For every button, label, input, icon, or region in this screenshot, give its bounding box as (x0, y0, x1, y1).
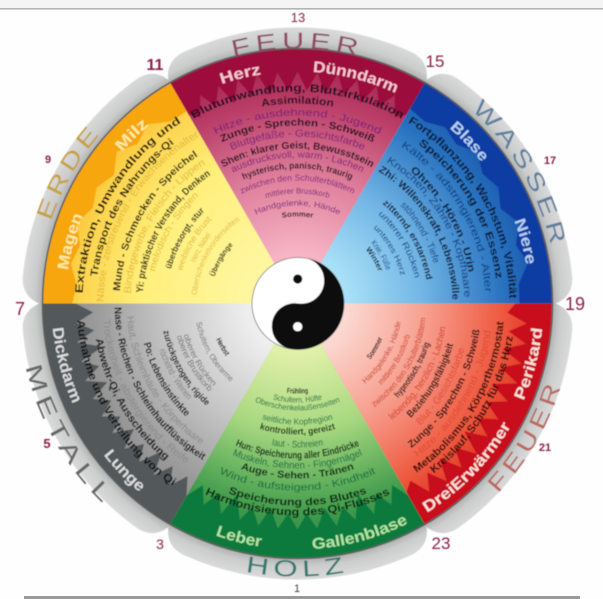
hour numbers: 23 (432, 534, 450, 553)
organ labels: Magen (56, 214, 83, 270)
hour numbers: 19 (565, 294, 585, 314)
text block: Wasser attributes: Speicherung der Essenz (419, 139, 502, 279)
text block: Feuer attributes: Handgelenke, Hände (359, 317, 409, 389)
text block: Metall attributes: röchelnd - Weinen (154, 346, 195, 403)
bottom grey bar (24, 596, 580, 599)
text block: Holz attributes: Wind - aufsteigend - Kindheit (218, 466, 377, 494)
text block: Erde attributes: Oberschenkelvorderseiten (181, 210, 243, 298)
text block: Holz attributes (205, 387, 390, 518)
text block: Feuer attributes: Zunge - Sprechen - Schweiß (220, 118, 375, 142)
text block: Feuer attributes: Blutumwandlung, Blutzirkulation (190, 84, 404, 119)
organ labels (56, 119, 149, 270)
hour numbers: 3 (156, 536, 164, 552)
text block: Wasser attributes: unteres Herz (374, 225, 406, 276)
heading: FEUER top: FEUER (229, 27, 366, 61)
text block: Feuer attributes: Shen: klarer Geist, Bewusstsein (220, 140, 374, 168)
text block: Holz attributes: Speicherung des Blutes (227, 485, 368, 509)
text block: Feuer attributes: hysterisch, panisch, traurig (241, 162, 353, 182)
heading: ERDE: ERDE (26, 115, 109, 226)
text block: Erde attributes: überbesorgt, stur (164, 208, 204, 269)
text block: Erde attributes: weibliche Brust (178, 216, 212, 270)
top page strip (0, 0, 603, 10)
hour numbers: 21 (539, 442, 551, 454)
text block: Erde attributes: Übergänge (206, 239, 235, 279)
text block: Metall attributes (76, 307, 233, 486)
text block: Feuer attributes: Kreislauf, Schutz für das Herz (426, 331, 529, 483)
text block: Erde attributes: Extraktion, Umwandlung und (74, 116, 181, 294)
text block: Erde attributes (74, 116, 240, 302)
organ labels: Niere (514, 218, 534, 264)
text block: Erde attributes: Nässe - zerstreuend - Erwachsenenalter (96, 132, 198, 302)
text block: Erde attributes: Transport des Nahrungs-Qi (90, 138, 174, 276)
heading: METALL: METALL (10, 355, 125, 517)
organ labels (450, 120, 534, 264)
hour numbers: 9 (45, 154, 51, 166)
heading: WASSER: WASSER (464, 88, 584, 257)
text block: Holz attributes: Hun: Speicherung aller Eindrücke (234, 438, 361, 462)
text block: Feuer attributes: Hitze - ausdehnend - Jugend (213, 108, 382, 134)
text block: Feuer attributes: Blut - Gesichtsfarbe (413, 344, 473, 431)
text block: Metall attributes: zurückgezogen, rigide (155, 327, 213, 411)
organ labels: DreiErwärmer (416, 405, 514, 531)
hour numbers: 15 (426, 52, 444, 71)
text block: Wasser attributes: Knochen, Zähne - Kopfhaare (386, 156, 470, 298)
heading: FEUER lower right: FEUER (480, 371, 574, 501)
text block: Holz attributes: Oberschenkelaußenseiten (254, 395, 341, 413)
wheel rim (42, 48, 552, 558)
text block: Wasser attributes: Knie, Füße (370, 240, 390, 270)
text block: Erde attributes: Mund - Schmecken - Speichel (112, 150, 198, 291)
organ labels: Dünndarm (313, 60, 398, 94)
hour numbers: 17 (544, 155, 556, 167)
panel: Feuer (Herz, Dünndarm) (170, 48, 425, 264)
text block: Erde attributes: Herz, Nabel (190, 232, 211, 262)
text block: Holz attributes: Schultern, Hüfte (272, 392, 323, 405)
panel: Erde (Magen, Milz) (42, 82, 275, 304)
text block: Feuer attributes: Handgelenke, Hände (254, 199, 340, 215)
text block: Feuer attributes: Zunge - Sprechen - Schweiß (404, 325, 494, 457)
text block: Wasser attributes: Ohren - Hören - Urin (411, 166, 474, 272)
heading: HOLZ: HOLZ (245, 551, 350, 582)
text block: Holz attributes: Muskeln, Sehnen - Fingernägel (231, 448, 364, 472)
hour numbers: 13 (291, 10, 305, 25)
text block: Feuer attributes: lebendig, herzlich - Lachen (385, 322, 457, 427)
text block: Holz attributes: Auge - Sehen - Tränen (240, 461, 355, 482)
panel: Holz (Leber, Gallenblase) (170, 343, 425, 558)
organ labels (52, 327, 144, 492)
organ labels (216, 516, 408, 550)
text block: Metall attributes: Schultern, Oberarme (189, 318, 237, 387)
text block: Feuer attributes: zwischen den Schulterblättern (240, 174, 355, 194)
text block: Erde attributes: Yi: praktischer Verstand, Denken (136, 170, 211, 292)
text block: Feuer attributes: mittlerer Brustkorb (375, 331, 415, 388)
icon: yin yang (252, 255, 350, 355)
text block: Feuer attributes (362, 318, 514, 474)
panel: Metall (Dickdarm, Lunge) (42, 302, 275, 524)
text block: Metall attributes: oberer Rücken (178, 331, 220, 390)
text block: Metall attributes: Trockenheit - abstergierend - Reife (84, 315, 194, 476)
text block: Feuer attributes: Sommer (364, 335, 385, 361)
text block: Feuer attributes: Blutgefäße - Gesichtsfarbe (230, 129, 365, 150)
organ labels: Leber (214, 523, 263, 551)
text block: Holz attributes: Harmonisierung des Qi-Flusses (203, 486, 392, 519)
panel: Wasser (Blase, Niere) (320, 82, 552, 304)
text block: Metall attributes: Aufnahme und Verteilung von Qi (55, 315, 181, 500)
text block: Erde attributes: melodisch - Singen (150, 192, 198, 272)
organ labels (218, 60, 398, 94)
text block: Holz attributes: seitliche Kopfregion (261, 411, 334, 427)
text block: Feuer attributes: zwischen den Schulterblättern (367, 313, 437, 414)
hour numbers: 5 (43, 436, 51, 451)
text block: Metall attributes: oberer Brustkorb (171, 332, 216, 395)
text block: Holz attributes: laut - Schreien (271, 437, 324, 451)
text block: Feuer attributes: Hitze - ausdehnend - Jugend (410, 326, 506, 467)
text block: Feuer attributes: Metabolismus, Körperthermostat (409, 316, 524, 485)
organ labels: Perikard (495, 321, 564, 404)
hour numbers: 7 (15, 299, 25, 319)
panel: Feuer (Dreifacher Erwärmer, Perikard) (320, 302, 552, 524)
text block: Feuer attributes: Assimilation (262, 95, 334, 107)
organ labels: Dickdarm (31, 321, 102, 408)
organ labels: Blase (450, 120, 488, 162)
text block: Wasser attributes: Zhi: Willenskraft, Lebenswille (378, 165, 460, 300)
text block: Erde attributes: Bindegewebe, Fleisch - Lippen (124, 160, 205, 293)
text block: Wasser attributes: unterer Rücken (378, 211, 420, 278)
text block: Holz attributes: kontrolliert, gereizt (259, 421, 336, 437)
text block: Metall attributes: Nase - Riechen - Schleimhautflüssigkeit (92, 302, 210, 475)
organ labels: Milz (114, 119, 149, 152)
organ labels: Gallenblase (311, 511, 410, 553)
organ labels (421, 327, 543, 513)
text block: Metall attributes: Herbst (214, 336, 232, 358)
text block: Feuer attributes: mittlerer Brustkorb (265, 188, 330, 198)
text block: Feuer attributes: Sommer (282, 212, 314, 218)
text block: Holz attributes: Frühling (286, 386, 309, 396)
text block: Feuer attributes: ausdrucksvoll, warm - Lachen (231, 150, 364, 172)
text block: Wasser attributes: zitternd, erstarrend (382, 200, 434, 280)
text block: Feuer attributes (190, 84, 404, 218)
text block: Wasser attributes: Kälte - adstringierend - Alter (402, 141, 491, 292)
text block: Wasser attributes: stöhnend - Tiefe (400, 202, 439, 263)
text block: Metall attributes: Haut, Schleimhäute - Körperhaare (109, 312, 208, 456)
text block: Metall attributes: Abwehr-Qi, Ausscheidung (82, 334, 173, 469)
text block: Feuer attributes: Beziehungsfähigkeit (404, 339, 461, 423)
organ labels: Herz (218, 66, 262, 84)
text block: Feuer attributes: hypnotisch, traurig (391, 339, 435, 401)
hour numbers: 1 (294, 583, 300, 595)
hour numbers: 11 (147, 57, 164, 74)
text block: Metall attributes: Po: Lebensinstinkte (136, 339, 193, 422)
organ labels: Lunge (99, 441, 151, 502)
text block: Wasser attributes: Winter (366, 246, 382, 271)
text block: Wasser attributes: Fortpflanzung, Wachstum, Vitalität (408, 116, 518, 299)
